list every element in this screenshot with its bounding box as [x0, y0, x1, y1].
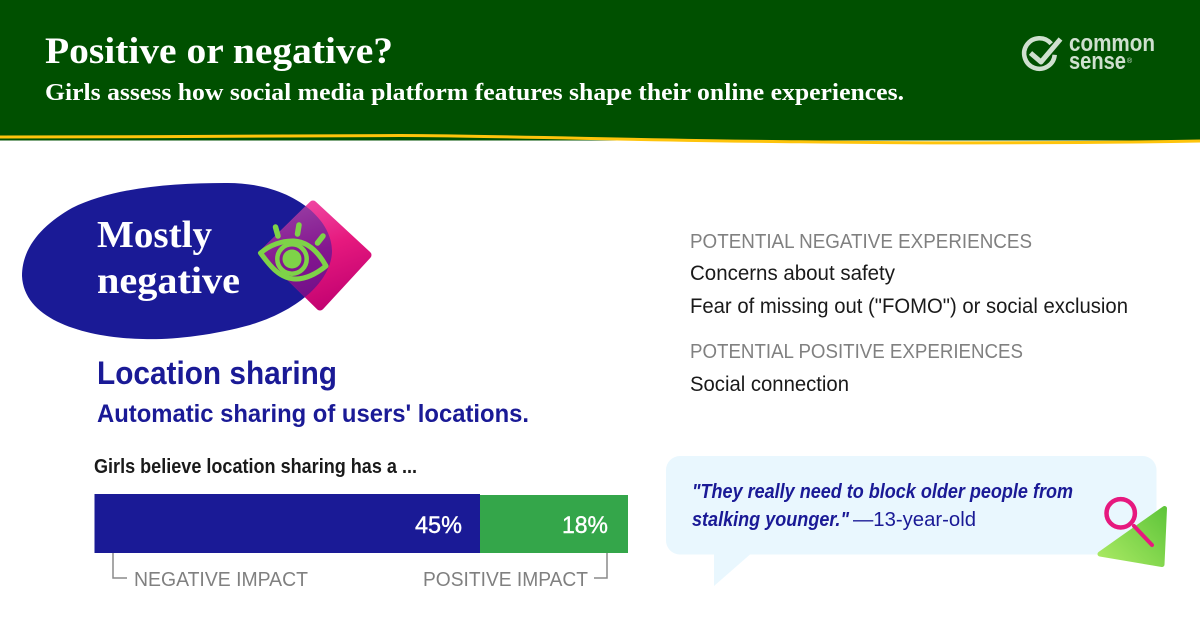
logo: common sense: common: [1069, 30, 1155, 57]
icon: eye: [260, 225, 326, 279]
bar: positive 18%: [480, 495, 628, 553]
logo: common sense: sense: [1069, 48, 1126, 75]
stacked bar chart: [94, 494, 628, 591]
value: 18%: 18%: [562, 512, 608, 539]
label: positive impact: POSITIVE IMPACT: [423, 569, 588, 591]
callout: quote: [666, 456, 1164, 586]
icon: magnifying glass: [1106, 499, 1152, 545]
badge label: Mostly: [97, 214, 212, 256]
bracket: positive: [594, 553, 607, 578]
quote text line 2: stalking younger.": [692, 509, 849, 531]
positive experiences heading: POTENTIAL POSITIVE EXPERIENCES: [690, 341, 1023, 363]
value: 45%: 45%: [415, 512, 462, 539]
negative experience 1: Concerns about safety: [690, 262, 895, 285]
feature description: Automatic sharing of users' locations.: [97, 400, 529, 428]
diamond overlap: [262, 206, 332, 298]
bar: negative 45%: [94, 494, 480, 553]
quote attribution: —13-year-old: [853, 509, 976, 531]
chart heading: Girls believe location sharing has a ...: [94, 456, 417, 478]
header banner: [0, 0, 1200, 143]
quote text: "They really need to block older people from: [692, 481, 1073, 503]
subtitle: Girls assess how social media platform features shape their online experiences.: [45, 80, 904, 106]
bracket: negative: [113, 553, 127, 578]
title: Positive or negative?: [45, 31, 393, 72]
logo: common sense: ®: [1127, 57, 1133, 65]
feature heading: Location sharing: [97, 355, 337, 391]
rating badge: mostly negative: [22, 183, 368, 339]
positive experience 1: Social connection: [690, 373, 849, 396]
icon: green triangle: [1100, 508, 1164, 564]
negative experiences heading: POTENTIAL NEGATIVE EXPERIENCES: [690, 231, 1032, 253]
label: negative impact: NEGATIVE IMPACT: [134, 569, 308, 591]
pink diamond: [264, 204, 368, 306]
panel: potential experiences: [690, 231, 1128, 396]
badge label: negative: [97, 260, 240, 302]
logo: common sense: [1024, 30, 1155, 75]
negative experience 2: Fear of missing out ("FOMO") or social exclusion: [690, 295, 1128, 318]
yellow wave line: [0, 136, 1200, 143]
